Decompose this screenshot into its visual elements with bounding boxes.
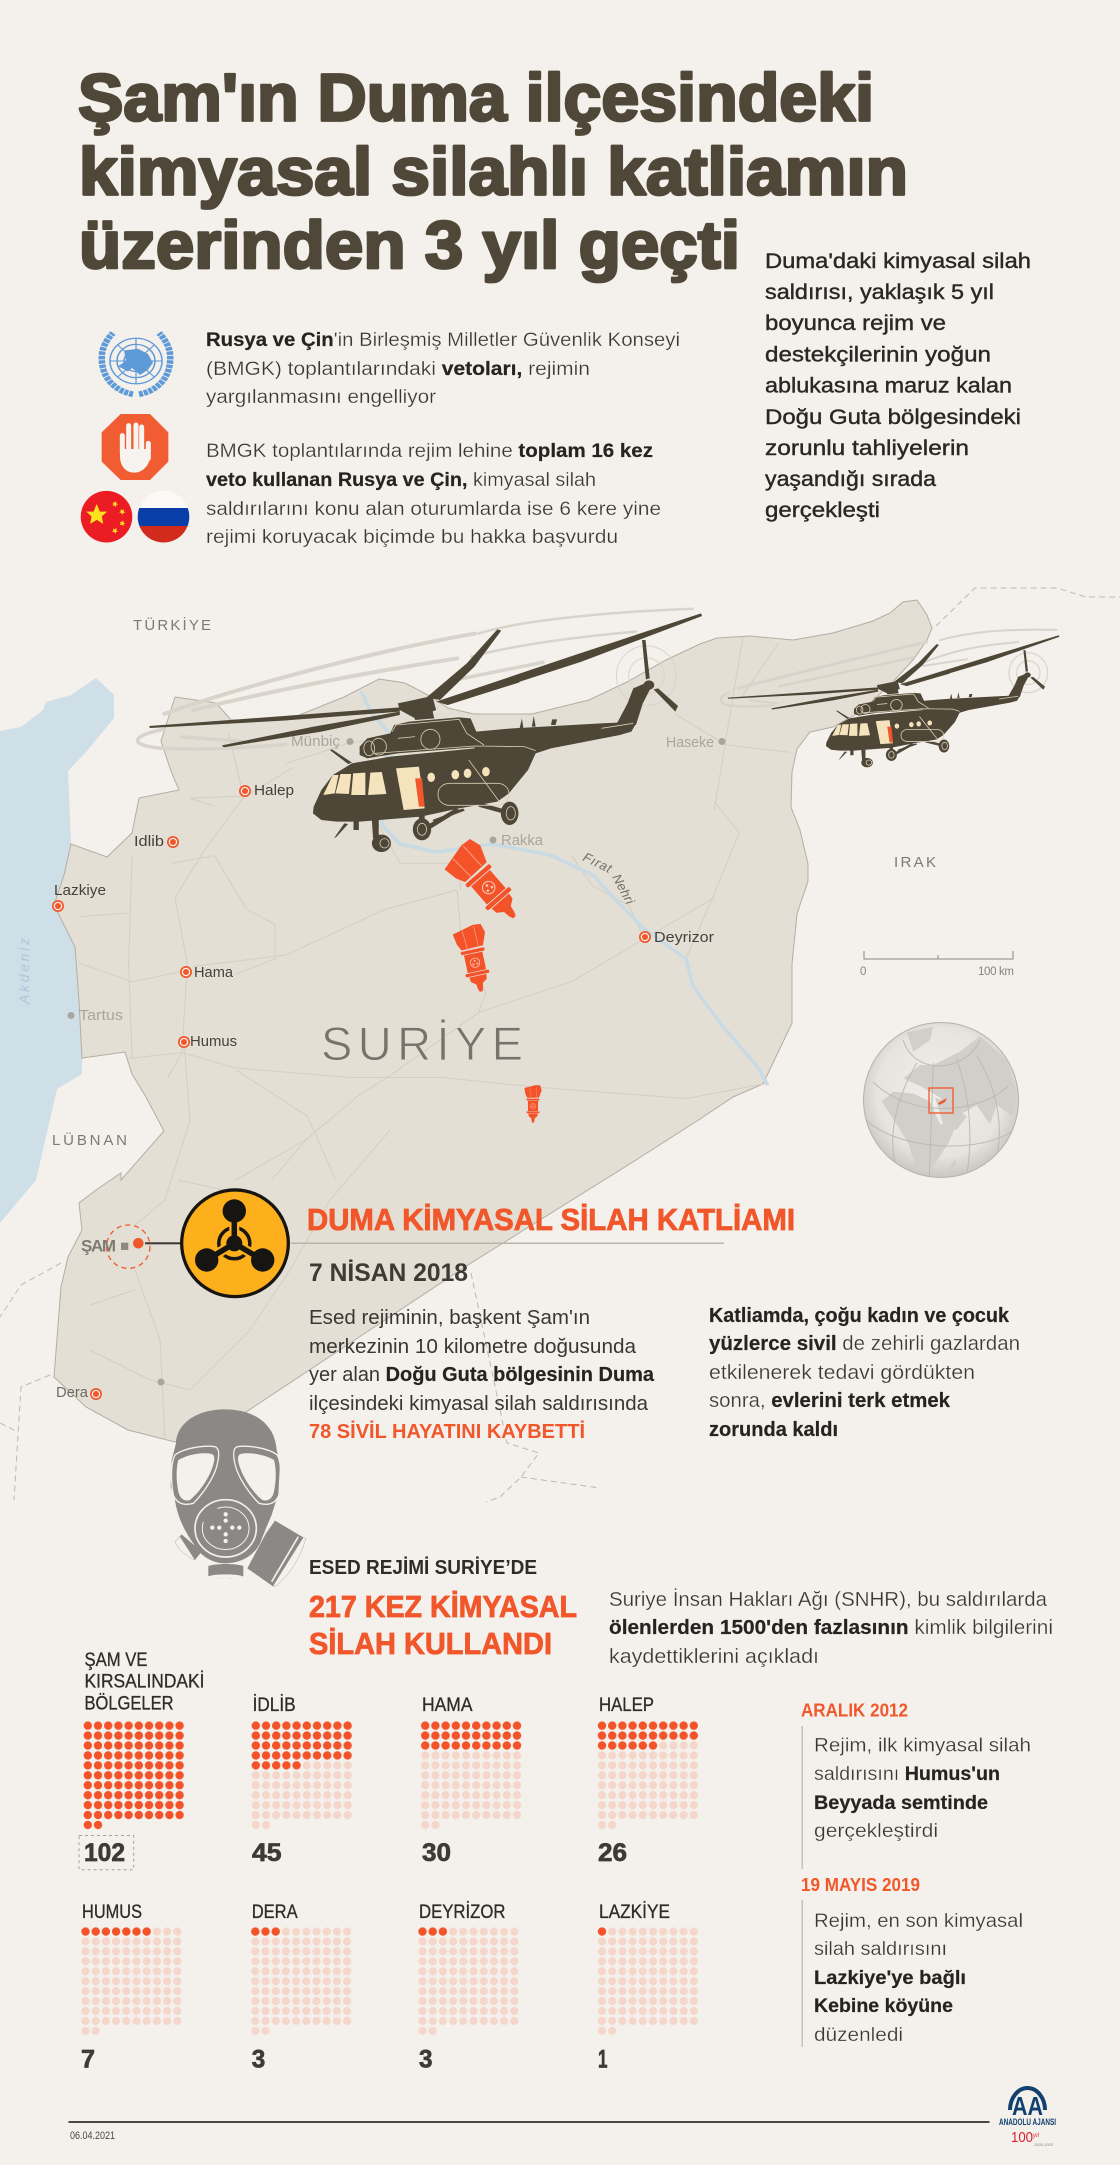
- rocket: medium: [452, 923, 497, 995]
- timeline: December 2012: Beyyada semtinde: [814, 1793, 988, 1814]
- title: üzerinden 3 yıl geçti: [79, 208, 740, 283]
- map: sea: [0, 678, 114, 1223]
- timeline: 19 May 2019: Rejim, en son kimyasal: [814, 1911, 1023, 1932]
- map: country and sea labels: [16, 616, 936, 1149]
- text: attack description: [309, 1307, 655, 1443]
- heading: 217 uses: SİLAH KULLANDI: [309, 1626, 552, 1661]
- text: SNHR: ölenlerden 1500'den fazlasının kimlik bilgilerini: [609, 1617, 1053, 1639]
- dot chart: Humus: [80, 1902, 182, 2074]
- text: SNHR: Suriye İnsan Hakları Ağı (SNHR), bu saldırılarda: [609, 1588, 1048, 1611]
- dot chart: İdlib: [251, 1695, 353, 1867]
- text: veto count: saldırılarını konu alan oturumlarda ise 6 kere yine: [206, 499, 661, 520]
- map: city labels: Halep: [254, 782, 294, 799]
- dot chart: Halep: [597, 1695, 699, 1867]
- icon: UN emblem: [102, 333, 170, 394]
- map: city labels: Idlib: [134, 833, 164, 850]
- dot chart: Dera: 3: [252, 2046, 265, 2074]
- intro paragraph: Duma'daki kimyasal silah: [765, 250, 1031, 273]
- text: displaced civilians: zorunda kaldı: [709, 1419, 838, 1441]
- map: Euphrates river: [361, 691, 768, 1085]
- text: attack description: 78 SİVİL HAYATINI KAYBETTİ: [309, 1420, 585, 1443]
- dot chart: Humus: 7: [81, 2046, 95, 2074]
- timeline: 19 May 2019: düzenledi: [814, 2025, 903, 2046]
- heading: 217 uses: [309, 1556, 577, 1661]
- text: UN veto: Rusya ve Çin 'in Birleşmiş Milletler Güvenlik Konseyi: [206, 330, 680, 351]
- dot chart: Şam: 102: [84, 1839, 125, 1867]
- logo: Anadolu Ajansi: yıl: [1032, 2133, 1040, 2139]
- map: country and sea labels: LÜBNAN: [52, 1131, 127, 1149]
- dot chart: Hama: HAMA: [422, 1695, 473, 1716]
- map: neighbouring borders: [0, 588, 1120, 1502]
- intro paragraph: destekçilerinin yoğun: [765, 344, 991, 366]
- map: Syria: [54, 600, 932, 1442]
- heading: Duma: DUMA KİMYASAL SİLAH KATLİAMI: [307, 1202, 795, 1237]
- timeline: 19 May 2019: 19 MAYIS 2019: [801, 1875, 920, 1895]
- title: kimyasal silahlı katliamın: [79, 134, 908, 210]
- map: roads: [79, 637, 789, 1440]
- text: SNHR: [609, 1588, 1053, 1668]
- Damascus marker: [81, 1225, 182, 1268]
- logo: Anadolu Ajansi: AA: [1012, 2091, 1043, 2121]
- icon: China flag: [81, 491, 132, 542]
- timeline: 19 May 2019: silah saldırısını: [814, 1939, 947, 1960]
- map: country and sea labels: Akdeniz: [16, 938, 32, 1005]
- icon: Russia flag: [137, 490, 191, 544]
- intro paragraph: yaşandığı sırada: [765, 468, 936, 491]
- text: attack description: merkezinin 10 kilometre doğusunda: [309, 1336, 637, 1358]
- text: attack description: ilçesindeki kimyasal silah saldırısında: [309, 1393, 649, 1415]
- text: displaced civilians: sonra, evlerini terk etmek: [709, 1390, 951, 1412]
- footer date: 06.04.2021: [70, 2130, 115, 2142]
- text: displaced civilians: Katliamda, çoğu kadın ve çocuk: [709, 1305, 1010, 1327]
- title: [78, 60, 908, 283]
- dot chart: Deyrizor: [417, 1902, 519, 2074]
- dot chart: Şam: BÖLGELER: [84, 1694, 174, 1715]
- intro paragraph: ablukasına maruz kalan: [765, 374, 1012, 398]
- text: SNHR: kaydettiklerini açıkladı: [609, 1646, 819, 1668]
- intro paragraph: saldırısı, yaklaşık 5 yıl: [765, 281, 994, 304]
- heading: 217 uses: 217 KEZ KİMYASAL: [309, 1589, 577, 1624]
- logo: Anadolu Ajansi: ANADOLU AJANSI: [999, 2117, 1056, 2128]
- map: country and sea labels: Nehri: [609, 871, 638, 908]
- timeline: 19 May 2019: [801, 1875, 1023, 2047]
- intro paragraph: Doğu Guta bölgesindeki: [765, 406, 1021, 429]
- text: attack description: Esed rejiminin, başkent Şam'ın: [309, 1307, 590, 1329]
- text: UN veto: [206, 330, 680, 408]
- map: country and sea labels: IRAK: [894, 854, 936, 871]
- dot chart: Humus: HUMUS: [82, 1902, 142, 1923]
- timeline: December 2012: saldırısını Humus'un: [814, 1764, 1000, 1785]
- timeline: December 2012: Rejim, ilk kimyasal silah: [814, 1736, 1031, 1757]
- map: city labels: Tartus: [79, 1007, 123, 1024]
- dot chart: Lazkiye: [597, 1902, 699, 2074]
- timeline: December 2012: gerçekleştirdi: [814, 1821, 938, 1842]
- text: veto count: BMGK toplantılarında rejim lehine toplam 16 kez: [206, 441, 653, 462]
- Damascus marker: ŞAM: [81, 1237, 116, 1256]
- dot chart: Lazkiye: 1: [598, 2046, 608, 2074]
- text: veto count: veto kullanan Rusya ve Çin, kimyasal silah: [206, 470, 596, 491]
- dot chart: Deyrizor: DEYRİZOR: [419, 1902, 506, 1923]
- map: city labels: Dera: [56, 1384, 89, 1401]
- dot chart: Şam: KIRSALINDAKİ: [84, 1672, 204, 1692]
- scale bar: 0: [860, 966, 866, 978]
- helicopter: small: [728, 635, 1059, 767]
- icon: gas mask: [171, 1409, 306, 1587]
- globe locator: [864, 1022, 1018, 1178]
- text: attack description: yer alan Doğu Guta bölgesinin Duma: [309, 1364, 655, 1386]
- map: country and sea labels: Fırat: [581, 849, 615, 876]
- map: city labels: Rakka: [501, 832, 544, 849]
- text: displaced civilians: etkilenerek tedavi gördükten: [709, 1362, 975, 1384]
- icon: chemical hazard: [180, 1188, 290, 1298]
- text: veto count: rejimi koruyacak biçimde bu hakka başvurdu: [206, 527, 618, 548]
- intro paragraph: zorunlu tahliyelerin: [765, 437, 969, 460]
- helicopter: large: [149, 613, 702, 852]
- title: Şam'ın Duma ilçesindeki: [78, 60, 874, 136]
- map: city labels: Münbiç: [291, 733, 341, 750]
- heading: 217 uses: ESED REJİMİ SURİYE’DE: [309, 1556, 537, 1579]
- map: city labels: Deyrizor: [654, 929, 714, 946]
- map: country name: SURİYE: [321, 1017, 523, 1070]
- scale bar: 100 km: [978, 966, 1014, 978]
- icon: stop hand: [102, 414, 168, 480]
- map: country and sea labels: TÜRKİYE: [133, 616, 211, 634]
- text: displaced civilians: [709, 1305, 1020, 1441]
- map: city labels: Humus: [190, 1033, 237, 1050]
- dot chart: İdlib: 45: [252, 1839, 282, 1867]
- map: city labels: [52, 733, 726, 1401]
- map: city labels: Haseke: [666, 734, 714, 751]
- dot chart: Şam: [79, 1650, 204, 1870]
- timeline: December 2012: ARALIK 2012: [801, 1701, 908, 1721]
- dot chart: Hama: [420, 1695, 522, 1867]
- timeline: 19 May 2019: Kebine köyüne: [814, 1996, 953, 2017]
- map: rotor wash: [137, 609, 1057, 749]
- scale bar: [860, 951, 1014, 978]
- text: UN veto: (BMGK) toplantılarındaki vetoları, rejimin: [206, 359, 590, 380]
- map: city labels: Lazkiye: [54, 882, 106, 899]
- logo: Anadolu Ajansi: 100: [1011, 2129, 1033, 2146]
- divider: [291, 1242, 724, 1244]
- dot chart: Lazkiye: LAZKİYE: [599, 1902, 670, 1923]
- dot chart: Dera: [250, 1902, 352, 2074]
- dot chart: Dera: DERA: [252, 1902, 298, 1923]
- map: city labels: Hama: [194, 964, 234, 981]
- rocket: small: [524, 1085, 542, 1123]
- dot chart: Şam: ŞAM VE: [84, 1650, 148, 1671]
- date: 7 NİSAN 2018: [309, 1259, 468, 1287]
- rocket: large: [440, 836, 531, 931]
- text: displaced civilians: yüzlerce sivil de zehirli gazlardan: [709, 1333, 1020, 1355]
- intro paragraph: gerçekleşti: [765, 499, 880, 522]
- dot chart: Halep: HALEP: [599, 1695, 654, 1716]
- footer rule: [68, 2121, 990, 2123]
- dot chart: Halep: 26: [598, 1839, 627, 1867]
- intro paragraph: [765, 250, 1031, 522]
- logo: Anadolu Ajansi: [999, 2088, 1056, 2147]
- timeline: 19 May 2019: Lazkiye'ye bağlı: [814, 1968, 966, 1989]
- dot chart: İdlib: İDLİB: [253, 1695, 296, 1716]
- dot chart: Deyrizor: 3: [419, 2046, 432, 2074]
- text: UN veto: yargılanmasını engelliyor: [206, 387, 437, 408]
- logo: Anadolu Ajansi: 1920-2020: [1034, 2142, 1054, 2147]
- dot chart: Hama: 30: [422, 1839, 451, 1867]
- text: veto count: [206, 441, 661, 548]
- timeline: December 2012: [801, 1701, 1031, 1869]
- intro paragraph: boyunca rejim ve: [765, 312, 946, 335]
